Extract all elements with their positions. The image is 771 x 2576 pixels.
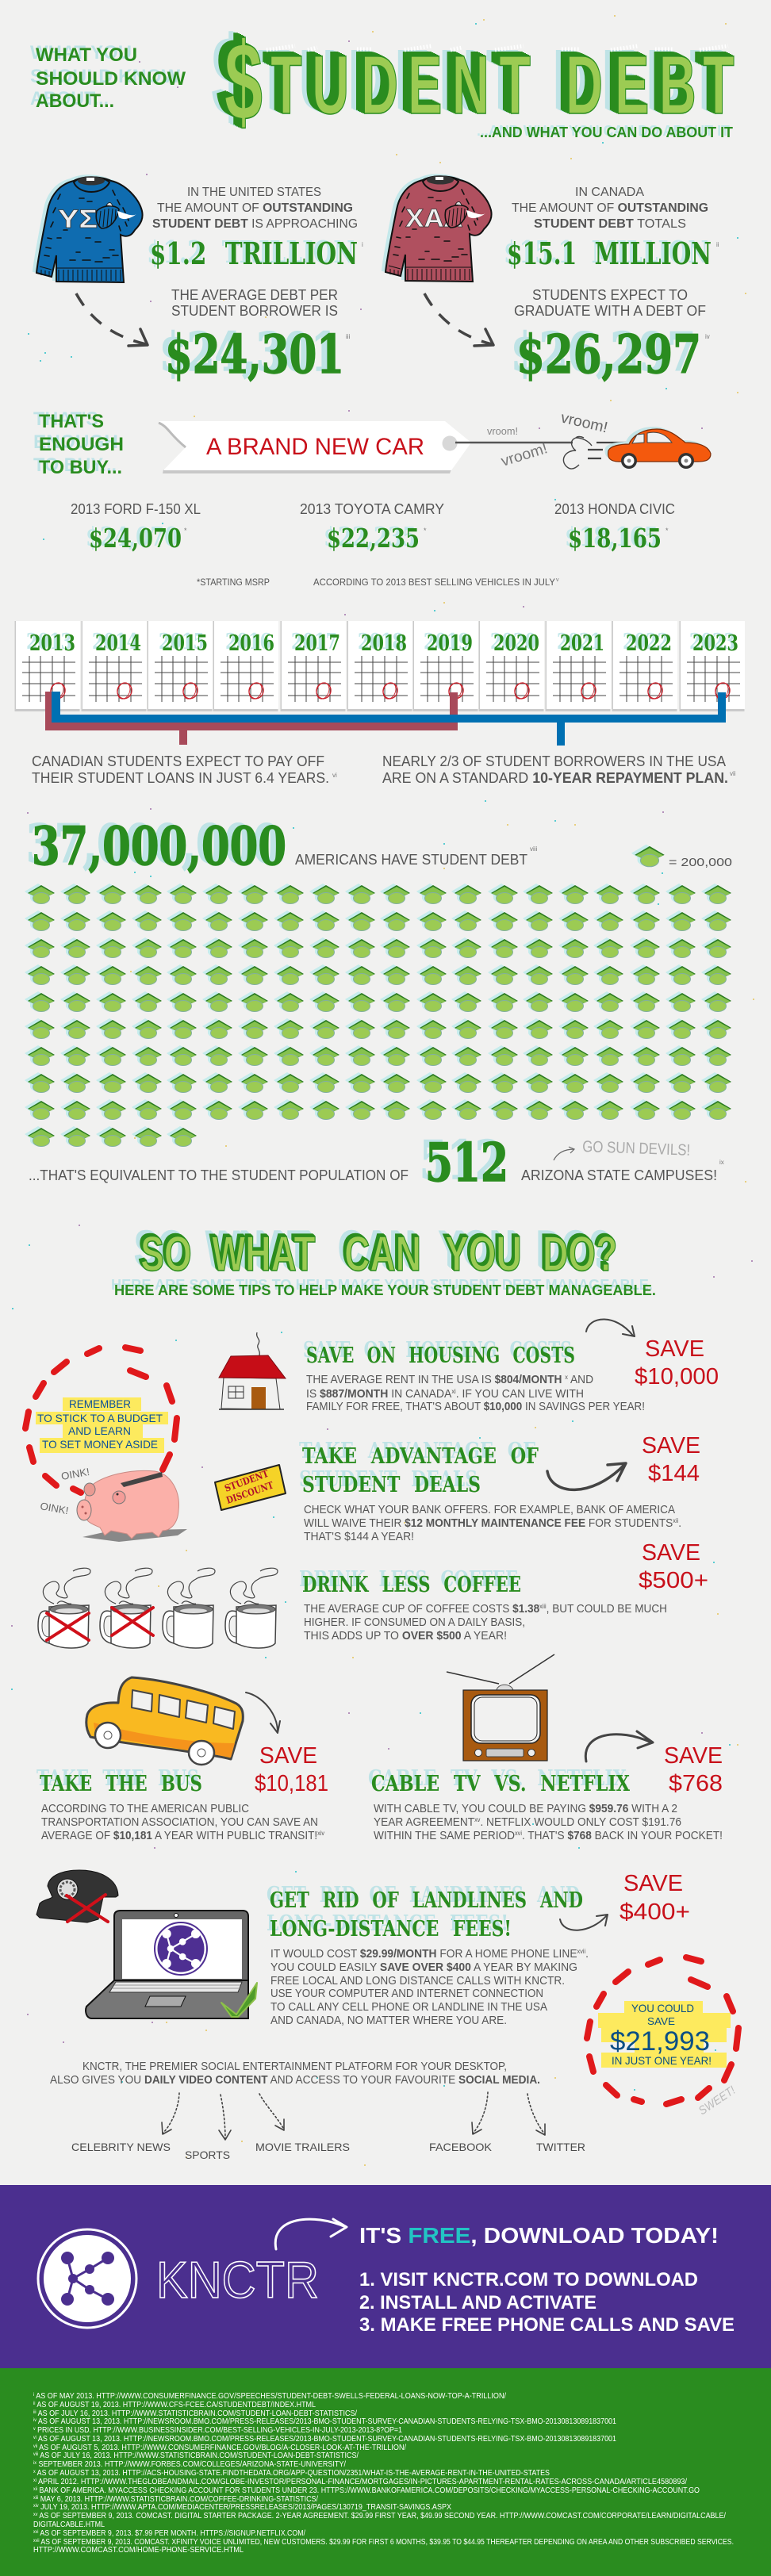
legend: one cap equals 200,000: = 200,000 — [669, 856, 732, 869]
tip: landlines and long-distance: . — [585, 1947, 589, 1961]
panel: united states: $1.2 TRILLION — [150, 236, 358, 271]
panel: canada: STUDENT DEBT TOTALS — [534, 217, 686, 231]
text: equivalent student population: ARIZONA STATE CAMPUSES! — [521, 1167, 717, 1183]
tip: cable tv vs netflix: . THAT'S — [522, 1829, 567, 1842]
panel: footnote sources: AS OF JULY 16, 2013. HTTP://WWW.STATISTICBRAIN.COM/STUDENT-LOAN-DEBT-STATISTICS/ — [38, 2409, 357, 2418]
heading: so what can you do: DO? — [543, 1227, 617, 1282]
tip: drink less coffee: xiii — [539, 1603, 547, 1610]
panel: united states: i — [362, 241, 363, 248]
tip: drink less coffee: HIGHER. IF CONSUMED ON A DAILY BASIS, — [304, 1616, 525, 1629]
panel: canada: $26,297 — [516, 324, 701, 385]
tip: student deals: STUDENT DEALS — [302, 1473, 481, 1497]
bracket: canadian repayment 6.4 years — [45, 692, 458, 745]
tip: cable tv vs netflix: xv — [474, 1816, 480, 1823]
heading: that's enough to buy — [39, 411, 124, 478]
icon: house — [219, 1332, 286, 1409]
tip: landlines and long-distance: LONG-DISTANCE FEES! — [270, 1917, 512, 1942]
text: equivalent student population: 512 — [425, 1132, 508, 1194]
download steps: 3. MAKE FREE PHONE CALLS AND SAVE — [359, 2314, 735, 2336]
calendar timeline 2013-2023: 2014 — [95, 631, 141, 656]
panel: footnote sources: DIGITALCABLE.HTML — [33, 2520, 105, 2529]
icon: piggy bank — [39, 1466, 187, 1542]
calendar timeline 2013-2023: 2023 — [692, 631, 738, 656]
panel: footnote sources — [0, 2368, 771, 2576]
callout: you could save $21,993: $21,993 — [610, 2026, 710, 2057]
icon: red sweater — [386, 176, 492, 282]
title: student debt: $ — [224, 20, 263, 144]
panel: canada: iv — [705, 333, 710, 340]
calendar timeline 2013-2023: 2019 — [427, 631, 473, 656]
tip: take the bus: AVERAGE OF $10,181 A YEAR WITH PUBLIC TRANSIT! — [41, 1829, 335, 1842]
tip: drink less coffee: THE AVERAGE CUP OF COFFEE COSTS $1.38 — [304, 1602, 543, 1616]
intro heading: what you should know about — [36, 44, 186, 112]
tip: landlines and long-distance: USE YOUR COMPUTER AND INTERNET CONNECTION — [270, 1987, 543, 2000]
calendar timeline 2013-2023: 2021 — [560, 631, 604, 656]
arrow: to download — [275, 2219, 347, 2249]
calendar timeline 2013-2023: 2016 — [228, 631, 274, 656]
tip: take the bus: ACCORDING TO THE AMERICAN PUBLIC — [41, 1802, 249, 1815]
panel: footnote sources: vi — [33, 2436, 36, 2440]
calendar timeline 2013-2023: 2015 — [162, 631, 208, 656]
icon: television — [447, 1654, 554, 1761]
savings: $10,181 — [255, 1743, 328, 1796]
download steps — [359, 2223, 735, 2336]
panel: footnote sources: xvi — [33, 2530, 38, 2535]
panel: united states: iii — [346, 333, 351, 340]
caption: canadian students: CANADIAN STUDENTS EXPECT TO PAY OFF — [32, 753, 324, 769]
feature labels: SPORTS — [185, 2149, 230, 2161]
tip: landlines and long-distance: YOU COULD EASILY SAVE OVER $400 A YEAR BY MAKING — [270, 1961, 577, 1974]
intro heading: what you should know about: WHAT YOU — [36, 44, 137, 66]
panel: footnote sources: x — [33, 2470, 36, 2474]
savings: $768 — [664, 1743, 723, 1796]
icon: blue sweater — [36, 176, 143, 282]
panel: canada — [507, 186, 719, 385]
callout: budget reminder: TO SET MONEY ASIDE — [42, 1438, 158, 1451]
panel: footnote sources: vii — [33, 2444, 37, 2449]
download steps: 2. INSTALL AND ACTIVATE — [359, 2292, 596, 2313]
feature labels: FACEBOOK — [429, 2141, 493, 2153]
panel: canada: STUDENTS EXPECT TO — [532, 287, 688, 303]
panel: footnote sources: AS OF AUGUST 5, 2013. HTTP://WWW.CONSUMERFINANCE.GOV/BLOG/A-CLOSER-LOOK-AT-THE-TRILLION/ — [39, 2444, 406, 2452]
vehicle price: honda — [554, 501, 675, 554]
tip: student deals: TAKE ADVANTAGE OF — [302, 1444, 539, 1469]
icon: student discount sticker: STUDENT — [223, 1468, 270, 1494]
panel: united states — [150, 186, 363, 385]
savings: $144: SAVE — [642, 1433, 700, 1459]
icon: piggy bank: OINK! — [60, 1466, 90, 1482]
subheading: tips: HERE ARE SOME TIPS TO HELP MAKE YOUR STUDENT DEBT MANAGEABLE. — [114, 1282, 656, 1298]
panel: footnote sources: ii — [33, 2402, 35, 2406]
feature labels: MOVIE TRAILERS — [255, 2141, 350, 2153]
savings: $500+ — [639, 1540, 708, 1593]
panel: footnote sources: xv — [33, 2513, 37, 2517]
caption: canadian students: vi — [332, 772, 337, 779]
tip: save on housing costs: AND — [570, 1373, 593, 1386]
caption: us borrowers — [382, 753, 736, 786]
arrow: tv savings — [585, 1731, 653, 1761]
tip: cable tv vs netflix: xvi — [515, 1830, 522, 1837]
car price footnote — [197, 577, 559, 588]
vehicle price: toyota: 2013 TOYOTA CAMRY — [300, 501, 444, 517]
icon: piggy bank: OINK! — [39, 1500, 70, 1516]
savings: $10,181: SAVE — [259, 1743, 317, 1769]
tip: save on housing costs: . IF YOU CAN LIVE WITH — [456, 1387, 584, 1401]
tip: cable tv vs netflix: $768 BACK IN YOUR POCKET! — [567, 1829, 735, 1842]
icon: student discount sticker: DISCOUNT — [224, 1479, 275, 1506]
text: knctr platform — [50, 2060, 540, 2087]
panel: footnote sources: xi — [33, 2478, 36, 2483]
panel: footnote sources: ix — [33, 2461, 36, 2466]
tip: save on housing costs: x — [565, 1374, 568, 1381]
icon: student discount sticker — [215, 1465, 286, 1510]
tip: student deals: WILL WAIVE THEIR $12 MONTHLY MAINTENANCE FEE FOR STUDENTS — [304, 1516, 681, 1530]
tip: take the bus — [40, 1772, 324, 1842]
car price footnote: v — [556, 577, 559, 583]
title: student debt: TUDENT DEBT — [270, 38, 735, 132]
vehicle price: honda: * — [666, 527, 669, 535]
savings: $10,000: SAVE — [645, 1336, 704, 1362]
tip: cable tv vs netflix: CABLE TV VS. NETFLIX — [371, 1772, 630, 1796]
tip: take the bus: TAKE THE BUS — [40, 1772, 202, 1796]
vehicle price: ford — [71, 501, 201, 554]
callout: go sun devils — [554, 1138, 691, 1160]
panel: footnote sources: PRICES IN USD. HTTP://WWW.BUSINESSINSIDER.COM/BEST-SELLING-VEHICLES-IN-JULY-2013-2013-8?OP=1 — [37, 2426, 402, 2435]
tip: cable tv vs netflix: WITH CABLE TV, YOU COULD BE PAYING $959.76 WITH A 2 — [374, 1802, 677, 1815]
panel: canada: IN CANADA — [575, 186, 644, 199]
bracket: us repayment 10 years — [52, 692, 726, 746]
panel: footnote sources: xii — [33, 2487, 37, 2492]
callout: you could save $21,993: YOU COULD — [631, 2002, 694, 2014]
icon: coffee mugs — [38, 1568, 278, 1648]
pictogram: graduation caps — [25, 884, 731, 1147]
vroom labels: vroom! — [487, 425, 518, 437]
callout: budget reminder: AND LEARN — [68, 1424, 131, 1437]
callout: budget reminder — [25, 1347, 177, 1493]
vehicle price: honda: 2013 HONDA CIVIC — [554, 501, 675, 517]
panel: footnote sources: AS OF AUGUST 13, 2013. HTTP://NEWSROOM.BMO.COM/PRESS-RELEASES/2013-BMO-STUDENT-SURVEY-CANADIAN-STUDENTS-RELYING-TSX-BMO-201308130891837001 — [38, 2417, 616, 2426]
subtitle: ...AND WHAT YOU CAN DO ABOUT IT — [480, 125, 733, 140]
tip: landlines and long-distance: xvii — [577, 1948, 585, 1955]
callout: you could save $21,993 — [587, 1957, 738, 2104]
icon: school bus — [86, 1677, 243, 1765]
text: americans have student debt: viii — [530, 845, 538, 853]
panel: footnote sources: JULY 19, 2013. HTTP://WWW.APTA.COM/MEDIACENTER/PRESSRELEASES/2013/PAGES/130719_TRANSIT-SAVINGS.ASPX — [40, 2503, 451, 2512]
caption: canadian students — [32, 753, 337, 786]
text: equivalent student population — [29, 1132, 724, 1194]
savings: $144 — [642, 1433, 700, 1486]
caption: us borrowers: NEARLY 2/3 OF STUDENT BORROWERS IN THE USA — [382, 753, 726, 769]
callout: you could save $21,993: IN JUST ONE YEAR! — [612, 2054, 712, 2067]
savings: $768: $768 — [669, 1771, 723, 1796]
arrow: housing savings — [586, 1320, 635, 1336]
panel: footnote sources: v — [33, 2427, 36, 2432]
tip: cable tv vs netflix: YEAR AGREEMENT — [374, 1815, 484, 1829]
savings: $500+: $500+ — [639, 1568, 708, 1593]
panel: footnote sources: AS OF MAY 2013. HTTP://WWW.CONSUMERFINANCE.GOV/SPEECHES/STUDENT-DEBT-SWELLS-FEDERAL-LOANS-NOW-TOP-A-TRILLION/ — [36, 2392, 506, 2401]
tow line — [455, 442, 573, 443]
panel: footnote sources: SEPTEMBER 2013. HTTP://WWW.FORBES.COM/COLLEGES/ARIZONA-STATE-UNIVERSITY/ — [38, 2460, 346, 2469]
vroom labels: vroom! — [499, 440, 550, 470]
heading: that's enough to buy: ENOUGH — [39, 434, 124, 455]
caption: us borrowers: ARE ON A STANDARD 10-YEAR REPAYMENT PLAN. — [382, 770, 728, 786]
tip: student deals — [302, 1444, 681, 1543]
panel: footnote sources: MAY 6, 2013. HTTP://WWW.STATISTICBRAIN.COM/COFFEE-DRINKING-STATISTICS/ — [40, 2495, 318, 2504]
vehicle price: ford: 2013 FORD F-150 XL — [71, 501, 201, 517]
tip: drink less coffee: DRINK LESS COFFEE — [302, 1573, 521, 1597]
tip: landlines and long-distance: FREE LOCAL AND LONG DISTANCE CALLS WITH KNCTR. — [270, 1974, 565, 1988]
savings: $144: $144 — [648, 1461, 700, 1486]
tip: save on housing costs: IS $887/MONTH IN CANADA — [306, 1387, 456, 1401]
tip: take the bus: TRANSPORTATION ASSOCIATION, YOU CAN SAVE AN — [41, 1815, 318, 1829]
intro heading: what you should know about: ABOUT... — [36, 90, 114, 112]
calendar timeline 2013-2023: 2018 — [361, 631, 407, 656]
panel: canada: ii — [716, 241, 719, 248]
vroom labels — [487, 409, 609, 470]
tip: drink less coffee: THIS ADDS UP TO OVER $500 A YEAR! — [304, 1629, 507, 1643]
panel: footnote sources: AS OF AUGUST 13, 2013. HTTP://NEWSROOM.BMO.COM/PRESS-RELEASES/2013-BMO-STUDENT-SURVEY-CANADIAN-STUDENTS-RELYING-TSX-BMO-201308130891837001 — [38, 2435, 616, 2444]
heading: so what can you do: YOU — [445, 1227, 522, 1282]
panel: footnote sources: i — [33, 2393, 34, 2398]
tip: landlines and long-distance: AND CANADA, NO MATTER WHERE YOU ARE. — [270, 2014, 507, 2027]
tip: save on housing costs: THE AVERAGE RENT IN THE USA IS $804/MONTH — [306, 1373, 568, 1386]
vehicle price: ford: $24,070 — [89, 523, 182, 554]
tip: student deals: . — [678, 1516, 681, 1530]
panel: footnote sources: HTTP://WWW.COMCAST.COM/HOME-PHONE-SERVICE.HTML — [33, 2546, 244, 2555]
tip: student deals: xii — [673, 1517, 678, 1524]
tip: student deals: CHECK WHAT YOUR BANK OFFERS. FOR EXAMPLE, BANK OF AMERICA — [304, 1503, 675, 1516]
panel: canada: THE AMOUNT OF OUTSTANDING — [512, 201, 708, 215]
arrow: bus savings — [246, 1692, 280, 1733]
callout: you could save $21,993: SAVE — [647, 2015, 675, 2027]
heading: that's enough to buy: TO BUY... — [39, 457, 122, 478]
calendar timeline 2013-2023: 2013 — [29, 631, 75, 656]
text: equivalent student population: ...THAT'S EQUIVALENT TO THE STUDENT POPULATION OF — [29, 1167, 409, 1183]
savings: $400+ — [619, 1871, 690, 1925]
panel: united states: THE AVERAGE DEBT PER — [171, 287, 338, 303]
heading: so what can you do: SO — [140, 1227, 192, 1282]
panel: united states: STUDENT BORROWER IS — [171, 303, 338, 319]
icon: blue sweater: ΥΣ — [58, 205, 98, 233]
panel: footnote sources: viii — [33, 2452, 38, 2457]
calendar timeline 2013-2023: 2017 — [294, 631, 340, 656]
tip: cable tv vs netflix — [371, 1772, 723, 1842]
heading: that's enough to buy: THAT'S — [39, 411, 104, 432]
feature labels: CELEBRITY NEWS — [71, 2141, 171, 2153]
vroom labels: vroom! — [559, 409, 609, 436]
text: americans have student debt: AMERICANS HAVE STUDENT DEBT — [295, 852, 527, 868]
dotted arrows to features — [162, 2092, 545, 2140]
car price footnote: *STARTING MSRP — [197, 577, 270, 588]
arrow: canada debt — [424, 293, 493, 346]
panel: footnote sources: BANK OF AMERICA. MYACCESS CHECKING ACCOUNT FOR STUDENTS UNDER 23. HTTPS://WWW.BANKOFAMERICA.COM/DEPOSITS/CHECKING/MYACCESS-PERSONAL-CHECKING-ACCOUNT.GO — [40, 2486, 700, 2495]
panel: footnote sources: xiii — [33, 2496, 38, 2501]
tip: save on housing costs: xi — [451, 1388, 456, 1395]
feature labels — [71, 2141, 585, 2161]
panel: footnote sources: xiv — [33, 2504, 39, 2509]
icon: crossed-out telephone — [36, 1870, 118, 1922]
vehicle price: toyota: * — [424, 527, 427, 535]
panel: united states: IN THE UNITED STATES — [187, 186, 321, 199]
heading: so what can you do: WHAT — [212, 1227, 316, 1282]
callout: budget reminder: REMEMBER — [69, 1397, 131, 1410]
callout: sweet: SWEET! — [696, 2083, 738, 2118]
icon: car with exhaust — [563, 427, 711, 469]
legend: one cap equals 200,000 — [631, 845, 732, 869]
text: knctr platform: ALSO GIVES YOU DAILY VIDEO CONTENT AND ACCESS TO YOUR FAVOURITE SOCIAL MEDIA. — [50, 2073, 540, 2087]
price tag banner: A BRAND NEW CAR — [206, 434, 424, 460]
arrow: deals savings — [547, 1463, 626, 1489]
tip: landlines and long-distance: TO CALL ANY CELL PHONE OR LANDLINE IN THE USA — [270, 2000, 547, 2014]
panel: united states: THE AMOUNT OF OUTSTANDING — [157, 201, 353, 215]
icon: red sweater: ΧΑΛ — [405, 204, 463, 232]
tip: cable tv vs netflix: . NETFLIX WOULD ONLY COST $191.76 — [480, 1815, 681, 1829]
panel: footnote sources: AS OF AUGUST 13, 2013. HTTP://ACS-HOUSING-STATE.FINDTHEDATA.ORG/APP-QUESTION/2351/WHAT-IS-THE-AVERAGE-RENT-IN-THE-UNITED-STATES — [37, 2469, 550, 2478]
callout: budget reminder: TO STICK TO A BUDGET — [37, 1412, 163, 1424]
callout: go sun devils: GO SUN DEVILS! — [582, 1138, 691, 1160]
tip: drink less coffee — [302, 1573, 667, 1643]
savings: $10,000 — [635, 1336, 719, 1390]
panel: download call to action — [0, 2185, 771, 2368]
arrow: phone savings — [560, 1915, 608, 1930]
panel: footnote sources: AS OF SEPTEMBER 9, 2013. $7.99 PER MONTH. HTTPS://SIGNUP.NETFLIX.COM/ — [40, 2529, 305, 2538]
icon: laptop with knctr logo — [86, 1911, 257, 2018]
car price footnote: ACCORDING TO 2013 BEST SELLING VEHICLES IN JULY — [313, 577, 555, 588]
vehicle price: honda: $18,165 — [568, 523, 662, 554]
panel: footnote sources: xvii — [33, 2539, 40, 2543]
panel: footnote sources: AS OF AUGUST 19, 2013. HTTP://WWW.CFS-FCEE.CA/STUDENTDEBT/INDEX.HTML — [36, 2401, 316, 2409]
panel: footnote sources: AS OF JULY 16, 2013. HTTP://WWW.STATISTICBRAIN.COM/STUDENT-LOAN-DEBT-STATISTICS/ — [40, 2451, 359, 2460]
knctr logo: KNCTR — [156, 2251, 319, 2309]
tip: take the bus: xiv — [317, 1830, 324, 1837]
tip: drink less coffee: , BUT COULD BE MUCH — [547, 1602, 667, 1616]
panel: united states: STUDENT DEBT IS APPROACHING — [152, 217, 358, 231]
text: equivalent student population: ix — [719, 1159, 724, 1166]
tip: cable tv vs netflix: WITHIN THE SAME PERIOD — [374, 1829, 529, 1842]
download steps: IT'S FREE, DOWNLOAD TODAY! — [359, 2223, 719, 2248]
vehicle price: ford: * — [184, 527, 187, 535]
caption: us borrowers: vii — [730, 770, 736, 777]
tip: save on housing costs: FAMILY FOR FREE, THAT'S ABOUT $10,000 IN SAVINGS PER YEAR! — [306, 1400, 645, 1413]
calendar timeline 2013-2023: 2022 — [626, 631, 672, 656]
panel: united states: $24,301 — [165, 324, 344, 385]
big number: 37,000,000: 37,000,000 — [32, 815, 286, 877]
tip: landlines and long-distance — [270, 1888, 589, 2027]
savings: $10,181: $10,181 — [255, 1771, 328, 1796]
savings: $768: SAVE — [664, 1743, 723, 1769]
intro heading: what you should know about: SHOULD KNOW — [36, 68, 186, 90]
tip: student deals: THAT'S $144 A YEAR! — [304, 1530, 414, 1543]
savings: $400+: SAVE — [623, 1871, 683, 1896]
savings: $10,000: $10,000 — [635, 1364, 719, 1390]
text: knctr platform: KNCTR, THE PREMIER SOCIAL ENTERTAINMENT PLATFORM FOR YOUR DESKTOP, — [82, 2060, 507, 2073]
tip: landlines and long-distance: GET RID OF LANDLINES AND — [270, 1888, 583, 1913]
heading: so what can you do — [140, 1227, 617, 1282]
heading: so what can you do: CAN — [344, 1227, 421, 1282]
panel: footnote sources: iv — [33, 2418, 36, 2423]
panel: footnote sources: APRIL 2012. HTTP://WWW.THEGLOBEANDMAIL.COM/GLOBE-INVESTOR/PERSONAL-FINANCE/MORTGAGES/IN-PICTURES-APARTMENT-RENTAL-RATES-ACROSS-CANADA/ARTICLE4580893/ — [38, 2478, 687, 2486]
calendar timeline 2013-2023 — [14, 621, 745, 711]
vehicle price: toyota: $22,235 — [327, 523, 420, 554]
knctr logo — [38, 2229, 319, 2328]
tip: landlines and long-distance: IT WOULD COST $29.99/MONTH FOR A HOME PHONE LINE — [270, 1947, 589, 1961]
download steps: 1. VISIT KNCTR.COM TO DOWNLOAD — [359, 2269, 698, 2290]
savings: $400+: $400+ — [619, 1899, 690, 1925]
arrow: us debt — [76, 293, 148, 346]
panel: canada: GRADUATE WITH A DEBT OF — [514, 303, 706, 319]
calendar timeline 2013-2023: 2020 — [493, 631, 539, 656]
tip: save on housing costs — [306, 1344, 645, 1413]
price tag banner — [159, 421, 471, 473]
tip: save on housing costs: SAVE ON HOUSING COSTS — [306, 1344, 575, 1368]
vehicle price: toyota — [300, 501, 444, 554]
panel: footnote sources: iii — [33, 2410, 36, 2415]
savings: $500+: SAVE — [642, 1540, 700, 1566]
feature labels: TWITTER — [536, 2141, 585, 2153]
title: student debt — [224, 20, 735, 144]
caption: canadian students: THEIR STUDENT LOANS IN JUST 6.4 YEARS. — [32, 770, 329, 786]
